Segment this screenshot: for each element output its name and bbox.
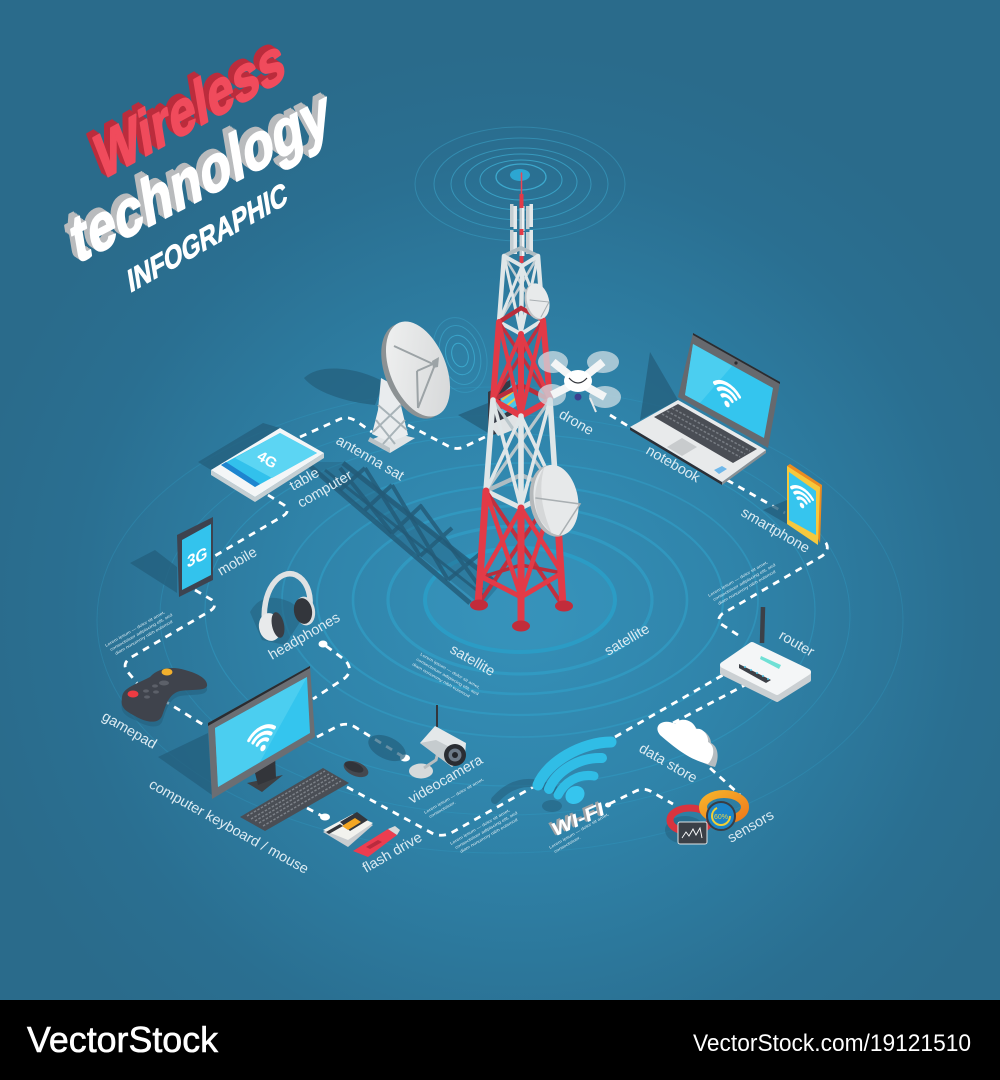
title: [60, 19, 335, 301]
icon: sensors watches: 60%: [714, 814, 728, 821]
icon: mobile 3G: 3G: [187, 543, 207, 572]
icon: computer keyboard and mouse: [240, 758, 371, 831]
footer: image id: VectorStock.com/19121510: [693, 1030, 971, 1057]
text block: flash drive lorem: consectetuer adipiscing elit, sed: [454, 810, 518, 850]
title: infographic: INFOGRAPHIC: [126, 176, 290, 301]
tower: top mast and antennas: [510, 173, 533, 263]
tower: small dish: [521, 281, 553, 322]
title: technology: technology: [65, 72, 334, 277]
label: satellite left: satellite: [447, 642, 498, 680]
icon: notebook: [630, 333, 780, 485]
label: WI-FI: WI-FI: [549, 798, 604, 841]
title: technology: technology: [60, 69, 329, 274]
tower shadow: [303, 462, 500, 606]
tower: large dish: [524, 461, 584, 540]
text block: smartphone lorem: diam nonummy nibh euismod: [717, 569, 777, 606]
label: flash drive: flash drive: [360, 830, 425, 876]
top signal rings: [415, 127, 625, 241]
text block: satellite lorem: consectetuer adipiscing elit, sed: [416, 657, 480, 696]
text block: Wi-Fi lorem: consectetuer.: [553, 835, 581, 854]
label: satellite right: satellite: [602, 621, 653, 659]
icon: data store cloud: [657, 720, 718, 767]
title: technology: technology: [63, 71, 332, 276]
floor signal rings: [97, 387, 903, 853]
tower: white lower section: [486, 400, 556, 508]
text block: satellite lorem: Lorem ipsum — dolor sit amet,: [420, 652, 481, 690]
tower: red base section: [470, 490, 573, 632]
label: videocamera: videocamera: [406, 752, 486, 807]
footer bar: [0, 1000, 1000, 1080]
label: sensors: sensors: [725, 807, 777, 846]
icon: headphones: [250, 574, 317, 645]
label: table computer: computer: [295, 467, 355, 511]
label: computer keyboard / mouse: computer keyboard / mouse: [146, 777, 311, 878]
connector end dots: [318, 640, 611, 820]
label: notebook: notebook: [643, 443, 703, 487]
text block: satellite lorem: diam nonummy nibh euismod: [412, 662, 471, 699]
icon: router: [722, 607, 809, 700]
text block: flash drive lorem: Lorem ipsum — dolor sit amet,: [449, 808, 511, 846]
icon: mobile 3G: [130, 517, 213, 597]
icon: transmission tower: [470, 173, 584, 632]
icon: big Wi-Fi symbol: [495, 742, 611, 812]
footer: brand: VectorStock: [27, 1019, 219, 1060]
text block: gamepad lorem: consectetuer adipiscing elit, sed: [109, 612, 173, 652]
text block: Wi-Fi lorem: Lorem ipsum — dolor sit amet,: [548, 812, 610, 850]
icon: sensors watches: [665, 794, 745, 844]
icon: gps device behind tower: [458, 380, 518, 436]
label: antenna sat: antenna sat: [333, 433, 407, 484]
icon: smartphone: [763, 464, 822, 545]
text block: videocamera lorem: consectetuer.: [428, 800, 456, 819]
label: mobile: mobile: [215, 544, 260, 579]
icon: tablet computer: [198, 423, 324, 502]
label: WI-FI: WI-FI: [548, 797, 603, 840]
text block: gamepad lorem: diam nonummy nibh euismod: [114, 619, 174, 656]
label: gamepad: gamepad: [99, 709, 159, 753]
icon: drone: [538, 351, 621, 412]
text block: gamepad lorem: Lorem ipsum — dolor sit amet,: [104, 610, 166, 648]
label: headphones: headphones: [266, 610, 343, 663]
icon: desktop monitor: [158, 666, 315, 799]
label: smartphone: smartphone: [738, 505, 812, 557]
title: Wireless: Wireless: [86, 20, 285, 192]
title: Wireless: Wireless: [85, 19, 283, 191]
label: data store: data store: [636, 741, 700, 787]
label: router: router: [776, 628, 817, 660]
text block: smartphone lorem: consectetuer adipiscing elit, sed: [712, 562, 776, 602]
label: table computer: table: [287, 465, 322, 494]
text block: smartphone lorem: Lorem ipsum — dolor sit amet,: [707, 560, 769, 598]
text block: flash drive lorem: diam nonummy nibh euismod: [459, 817, 519, 854]
label: WI-FI: WI-FI: [551, 798, 606, 841]
tower: red upper section: [493, 308, 550, 416]
icon: gamepad: [122, 668, 207, 726]
title: Wireless: Wireless: [89, 22, 288, 194]
icon: satellite antenna: [304, 312, 495, 453]
tower: white upper section: [499, 248, 543, 334]
title: Wireless: Wireless: [88, 21, 286, 193]
text block: videocamera lorem: Lorem ipsum — dolor sit amet,: [423, 777, 485, 815]
title: technology: technology: [62, 70, 331, 275]
label: drone: drone: [556, 407, 596, 439]
title: Wireless: Wireless: [91, 23, 289, 195]
icon: tablet computer: 4G: [254, 448, 280, 472]
icon: videocamera: [364, 705, 466, 778]
dashed connector network: [125, 415, 827, 835]
icon: flash drive: [323, 812, 400, 857]
title: technology: technology: [66, 73, 335, 278]
